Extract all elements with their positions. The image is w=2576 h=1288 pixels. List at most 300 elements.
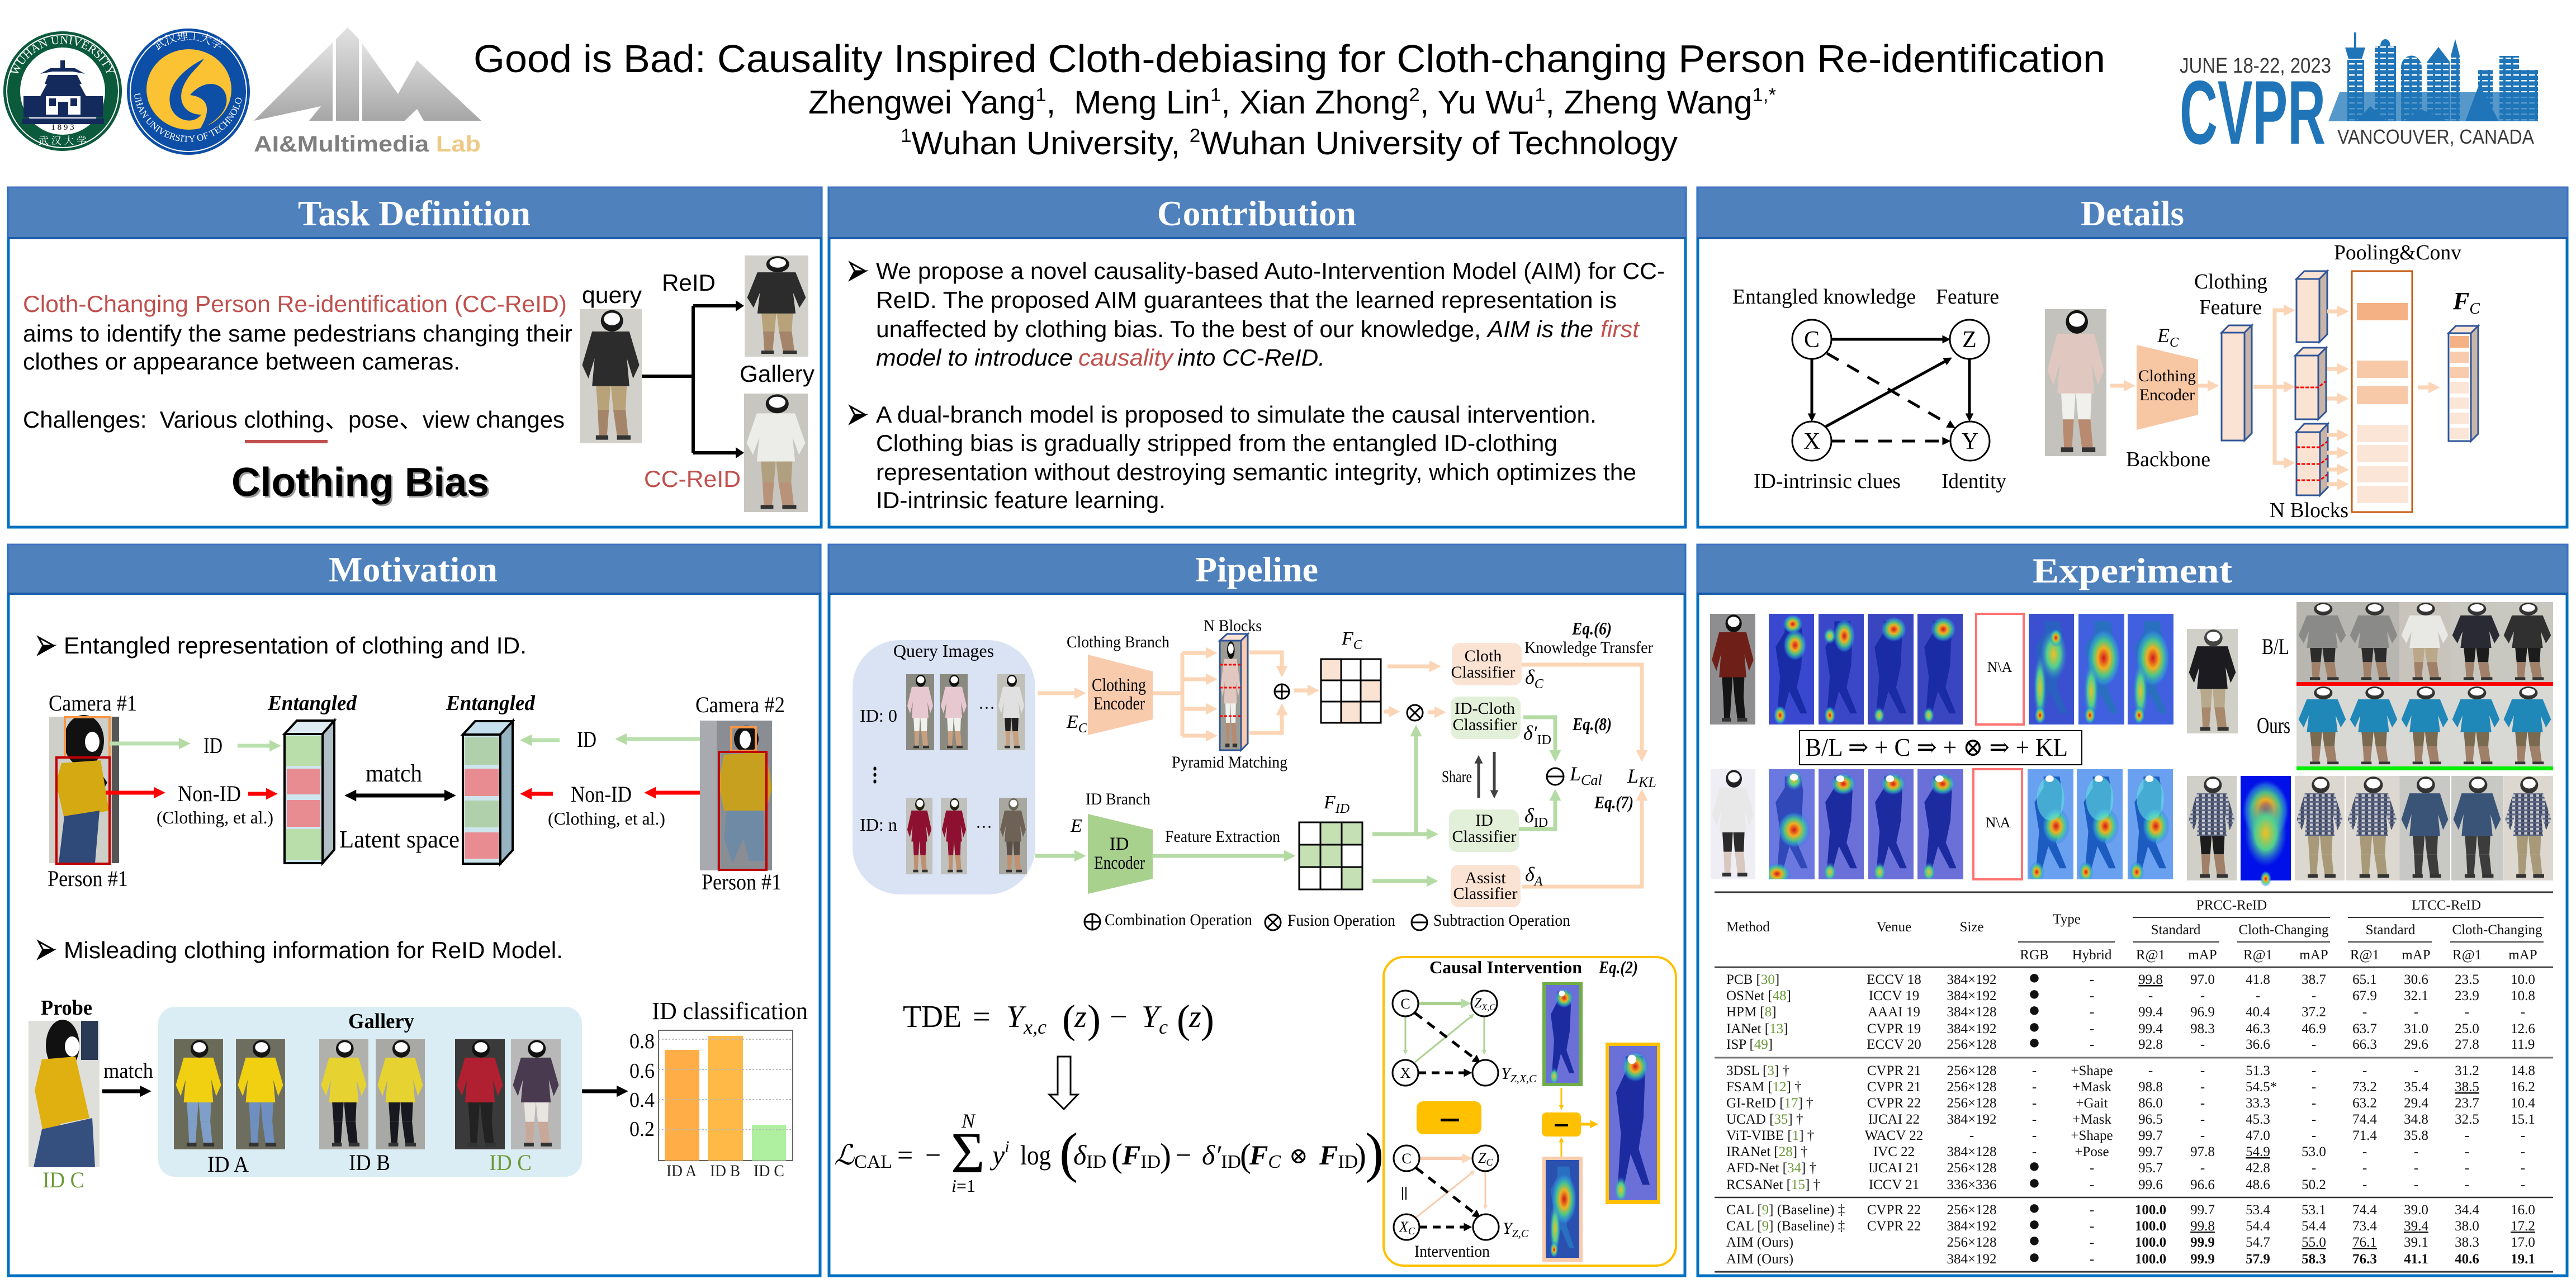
table group: single-modal methods: 23.5 <box>2455 972 2479 987</box>
classifiers <box>1449 643 1522 907</box>
classifiers: Classifier <box>1451 663 1515 681</box>
gallery box: ID B <box>349 1150 390 1175</box>
table group: hybrid methods: - <box>2362 1144 2367 1159</box>
retrieval row: ours <box>2296 686 2553 770</box>
table group: hybrid methods: - <box>2362 1161 2367 1176</box>
table group: hybrid methods: 54.9 <box>2246 1144 2270 1159</box>
loss labels: Eq.(7) <box>1594 792 1633 812</box>
clothing encoder: Backbone <box>2126 448 2210 471</box>
table group: hybrid methods: 29.4 <box>2404 1096 2428 1111</box>
text block: contribution 2: ID-intrinsic feature learning. <box>876 487 1166 513</box>
query images box <box>853 640 1035 894</box>
table group: hybrid methods: - <box>2032 1128 2037 1143</box>
table group: single-modal methods: 67.9 <box>2352 988 2377 1003</box>
table group: baseline and ours: 99.8 <box>2190 1219 2215 1234</box>
table group: baseline and ours: 73.4 <box>2352 1219 2377 1234</box>
table group: single-modal methods: 384×192 <box>1947 972 1997 987</box>
table group: hybrid methods: 384×128 <box>1947 1144 1997 1159</box>
table group: baseline and ours: 57.9 <box>2246 1252 2270 1267</box>
clothing encoder: E <box>2157 324 2170 347</box>
equation: TDE: − <box>1110 1000 1128 1034</box>
table group: hybrid methods: RCSANet [15] † <box>1726 1177 1820 1192</box>
table group: hybrid methods: 32.5 <box>2455 1112 2479 1127</box>
table group: hybrid methods: IJCAI 21 <box>1868 1161 1920 1176</box>
table group: single-modal methods: 25.0 <box>2455 1021 2479 1036</box>
table group: hybrid methods <box>1726 1063 2535 1194</box>
table group: single-modal methods: - <box>2148 988 2153 1003</box>
icon: bullet arrow <box>39 637 54 654</box>
table group: single-modal methods: ● <box>2028 982 2040 1005</box>
query images box: ··· <box>978 699 995 717</box>
table group: hybrid methods: - <box>2200 1063 2205 1078</box>
causal graph: factual: Y <box>1501 1064 1510 1083</box>
entangled diagram: ID <box>203 733 222 758</box>
feature grid: FID <box>1299 822 1362 889</box>
logo: CVPR 2023 Vancouver: VANCOUVER, CANADA <box>2337 125 2534 148</box>
entangled diagram: ID <box>577 727 596 752</box>
gallery box <box>158 1007 582 1177</box>
equation: TDE: ) <box>1087 997 1101 1041</box>
gallery box: ID C <box>489 1150 532 1175</box>
table group: hybrid methods: - <box>2521 1144 2525 1159</box>
table header: Hybrid <box>2072 948 2112 963</box>
table group: hybrid methods: - <box>1969 1128 1974 1143</box>
text block: contribution 2: representation without destroying semantic integrity, which optimizes the <box>876 459 1636 485</box>
text block: contribution 1: causality <box>1078 344 1175 371</box>
table group: hybrid methods: - <box>2414 1144 2418 1159</box>
table group: single-modal methods: 65.1 <box>2352 972 2377 987</box>
table group: hybrid methods: IJCAI 22 <box>1868 1112 1920 1127</box>
table group: hybrid methods: - <box>2032 1079 2037 1095</box>
loss labels <box>1442 618 1656 889</box>
table group: single-modal methods: - <box>2090 988 2094 1003</box>
table group: baseline and ours: 99.9 <box>2190 1235 2215 1250</box>
table group: baseline and ours: 100.0 <box>2135 1202 2166 1218</box>
equation: CAL loss: − <box>1176 1139 1191 1171</box>
table group: hybrid methods: +Mask <box>2072 1112 2111 1127</box>
entangled diagram: Latent space <box>339 826 460 853</box>
title: Good is Bad: Causality Inspired Cloth-debiasing for Cloth-changing Person Re-identification <box>473 37 2105 80</box>
table group: hybrid methods: 14.8 <box>2511 1063 2535 1078</box>
panel: Experiment <box>1697 544 2568 1276</box>
logo: Wuhan University: 武 汉 大 学 <box>39 133 87 148</box>
table group: baseline and ours: 100.0 <box>2135 1235 2166 1250</box>
table group: hybrid methods: - <box>2465 1144 2469 1159</box>
clothing branch <box>1038 617 1363 771</box>
table group: baseline and ours: 76.1 <box>2352 1235 2377 1250</box>
authors: 1,* <box>1752 84 1776 106</box>
classifiers: ID <box>1475 811 1493 830</box>
table group: single-modal methods: 66.3 <box>2352 1037 2377 1052</box>
table group: hybrid methods: 54.5* <box>2246 1079 2277 1095</box>
equation: CAL loss: ) <box>1355 1137 1366 1174</box>
gallery box: ID A <box>207 1152 249 1177</box>
table group: single-modal methods: 10.8 <box>2511 988 2535 1003</box>
equation: TDE: ( <box>1177 997 1190 1041</box>
text block: definition <box>23 291 572 433</box>
affiliations: Wuhan University of Technology <box>1200 125 1678 162</box>
equation: CAL loss: ) <box>1365 1121 1384 1183</box>
table header: mAP <box>2402 948 2431 963</box>
table group: hybrid methods: 99.7 <box>2138 1128 2163 1143</box>
table group: hybrid methods: 23.7 <box>2455 1096 2479 1111</box>
table group: hybrid methods: 31.2 <box>2455 1063 2479 1078</box>
table group: hybrid methods: 99.7 <box>2138 1144 2163 1159</box>
table group: baseline and ours: 38.3 <box>2455 1235 2479 1250</box>
table group: baseline and ours: CAL [9] (Baseline) ‡ <box>1726 1202 1845 1218</box>
entangled diagram: (Clothing, et al.) <box>548 808 665 828</box>
table group: hybrid methods: 74.4 <box>2352 1112 2377 1127</box>
table group: baseline and ours: CVPR 22 <box>1867 1219 1921 1234</box>
table group: hybrid methods: - <box>2312 1161 2316 1176</box>
heatmap row 2 <box>1711 769 2173 885</box>
bar chart: ID classification: ID classification <box>652 997 808 1025</box>
box: causal intervention <box>1384 957 1676 1266</box>
feature grid: FC <box>1321 659 1381 723</box>
causal graph: intervention: Y <box>1503 1219 1512 1238</box>
heatmap row 1: N\A <box>1987 659 2012 675</box>
table group: hybrid methods: 35.4 <box>2404 1079 2428 1095</box>
table group: hybrid methods: 45.3 <box>2246 1112 2270 1127</box>
equation: CAL loss: F <box>1319 1139 1338 1171</box>
loss labels: Share <box>1442 768 1472 786</box>
text block: contribution 2: Clothing bias is gradually stripped from the entangled ID-clothing <box>876 430 1557 456</box>
authors: 1 <box>1535 84 1545 106</box>
table group: hybrid methods: 50.2 <box>2302 1177 2326 1192</box>
bar chart: ID classification: ID B <box>710 1162 740 1180</box>
photo: input person <box>2045 309 2106 456</box>
equation: TDE: c <box>1159 1016 1168 1038</box>
table group: single-modal methods: - <box>2200 988 2205 1003</box>
table group: single-modal methods: 92.8 <box>2138 1037 2163 1052</box>
table group: baseline and ours: 39.1 <box>2404 1235 2428 1250</box>
heading: Motivation <box>329 550 498 589</box>
table header: mAP <box>2188 948 2217 963</box>
causal graph: factual: X,C <box>1481 1003 1495 1012</box>
equation: CAL loss: − <box>925 1139 941 1171</box>
bar chart: ID classification: 0.8 <box>629 1030 655 1053</box>
table group: baseline and ours: AIM (Ours) <box>1726 1235 1793 1250</box>
retrieval row: plaid <box>2187 776 2553 887</box>
bar chart: ID classification: 0.2 <box>629 1117 655 1141</box>
table group: hybrid methods: - <box>2521 1161 2525 1176</box>
legend: operations: Fusion Operation <box>1287 911 1395 930</box>
table header: LTCC-ReID <box>2412 898 2481 913</box>
equation: CAL loss: N <box>961 1110 976 1132</box>
causal graph: intervention: C <box>1486 1157 1493 1168</box>
heatmap row 1 <box>1710 614 2174 725</box>
table group: single-modal methods: - <box>2521 1005 2525 1020</box>
text block: definition: aims to identify the same pedestrians changing their <box>23 320 572 347</box>
table group: single-modal methods: ● <box>2028 966 2040 988</box>
box: causal intervention: Causal Intervention <box>1429 957 1582 977</box>
table group: single-modal methods: 96.9 <box>2190 1005 2215 1020</box>
table header: R@1 <box>2350 948 2379 963</box>
table group: single-modal methods: AAAI 19 <box>1868 1005 1920 1020</box>
icon: bullet arrow 2 <box>850 406 865 423</box>
table group: baseline and ours: 54.7 <box>2246 1235 2270 1250</box>
table group: hybrid methods: ViT-VIBE [1] † <box>1726 1128 1814 1143</box>
clothing encoder: Feature <box>2199 296 2262 319</box>
equation: TDE <box>903 997 1214 1041</box>
table group: single-modal methods: 41.8 <box>2246 972 2270 987</box>
table group: hybrid methods: - <box>2465 1128 2469 1143</box>
table group: single-modal methods: - <box>2200 1037 2205 1052</box>
table group: hybrid methods: - <box>2200 1128 2205 1143</box>
arrow: hollow down <box>1049 1057 1078 1109</box>
heatmap: intervention <box>1542 1157 1583 1262</box>
table group: single-modal methods: ECCV 20 <box>1867 1037 1921 1052</box>
table header: R@1 <box>2452 948 2482 963</box>
table group: single-modal methods: 37.2 <box>2302 1005 2326 1020</box>
equation: CAL loss: ℒ <box>834 1139 854 1171</box>
equation: CAL loss: ID <box>1086 1152 1106 1172</box>
gallery box: Gallery <box>348 1010 414 1033</box>
table group: hybrid methods: ● <box>2028 1154 2040 1177</box>
equation: CAL loss: F <box>1249 1139 1268 1171</box>
causal graph: C <box>1804 327 1820 353</box>
table header: Standard <box>2366 922 2416 937</box>
table group: single-modal methods: OSNet [48] <box>1726 988 1791 1003</box>
label: query: query <box>582 282 642 308</box>
equation: CAL loss: y <box>992 1139 1005 1171</box>
table group: baseline and ours <box>1726 1196 2535 1268</box>
table group: hybrid methods: - <box>2362 1177 2367 1192</box>
authors: , Yu Wu <box>1420 84 1535 121</box>
table group: single-modal methods: 31.0 <box>2404 1021 2428 1036</box>
clothing encoder: C <box>2170 335 2179 350</box>
loss labels: L <box>1627 765 1639 787</box>
table group: single-modal methods: IANet [13] <box>1726 1021 1788 1036</box>
table group: hybrid methods: 97.8 <box>2190 1144 2215 1159</box>
table group: single-modal methods: 97.0 <box>2190 972 2215 987</box>
table group: hybrid methods: 53.0 <box>2302 1144 2326 1159</box>
logo: CVPR 2023 Vancouver: JUNE 18-22, 2023 <box>2180 54 2331 78</box>
table group: hybrid methods: - <box>2312 1096 2316 1111</box>
clothing branch: Clothing Branch <box>1067 633 1169 651</box>
text block: contribution 1 <box>876 258 1665 371</box>
equation: TDE: z <box>1074 1000 1087 1034</box>
table group: baseline and ours: CAL [9] (Baseline) ‡ <box>1726 1219 1845 1234</box>
table group: hybrid methods: - <box>2465 1161 2469 1176</box>
table group: hybrid methods: - <box>2090 1177 2094 1192</box>
table group: hybrid methods: - <box>2032 1112 2037 1127</box>
table group: single-modal methods: 27.8 <box>2455 1037 2479 1052</box>
equation: CAL loss: ID <box>1140 1152 1161 1172</box>
logo: Wuhan University of Technology: 武汉理工大学 <box>154 31 223 50</box>
logo: CVPR 2023 Vancouver <box>2180 32 2538 163</box>
classifiers: Classifier <box>1453 716 1517 734</box>
panel: Pipeline <box>828 544 1685 1276</box>
loss labels: L <box>1570 763 1581 785</box>
ID branch: ID <box>1335 802 1349 816</box>
table group: hybrid methods: 15.1 <box>2511 1112 2535 1127</box>
loss labels: Cal <box>1581 772 1602 788</box>
table group: baseline and ours: 54.4 <box>2302 1219 2326 1234</box>
table group: hybrid methods: 16.2 <box>2511 1079 2535 1095</box>
photo: camera 1 person <box>49 715 119 863</box>
entangled diagram: match <box>366 760 422 787</box>
table group: hybrid methods: - <box>2521 1177 2525 1192</box>
entangled diagram: Camera #2 <box>695 692 785 717</box>
table group: single-modal methods: 38.7 <box>2302 972 2326 987</box>
table group: hybrid methods: WACV 22 <box>1865 1128 1923 1143</box>
text block: contribution 1: ReID. The proposed AIM guarantees that the learned representation is <box>876 287 1617 313</box>
heatmap: factual <box>1542 982 1583 1086</box>
table group: hybrid methods: 35.8 <box>2404 1128 2428 1143</box>
causal graph: factual: C <box>1400 996 1410 1012</box>
table header: PRCC-ReID <box>2196 898 2267 913</box>
table group: hybrid methods: - <box>2312 1128 2316 1143</box>
table group: single-modal methods: 384×192 <box>1947 1021 1997 1036</box>
bar chart: ID classification <box>629 997 808 1180</box>
photo: gallery same clothes <box>745 255 808 357</box>
table group: baseline and ours: - <box>2090 1219 2094 1234</box>
text block: contribution 1: into CC-ReID. <box>1177 344 1325 371</box>
causal graph: Z <box>1962 327 1977 353</box>
table group: single-modal methods: 99.4 <box>2138 1005 2163 1020</box>
causal graph: factual: Z <box>1474 996 1481 1011</box>
table group: hybrid methods: - <box>2312 1079 2316 1095</box>
probe image <box>29 996 153 1192</box>
causal graph: ID-intrinsic clues <box>1754 470 1901 493</box>
table group: single-modal methods: 99.8 <box>2138 972 2163 987</box>
table group: single-modal methods: CVPR 19 <box>1867 1021 1921 1036</box>
table group: hybrid methods: 48.6 <box>2246 1177 2270 1192</box>
table rules <box>1715 892 2553 1272</box>
table header: mAP <box>2508 948 2537 963</box>
table header: Type <box>2053 912 2081 927</box>
equation: CAL loss: C <box>1268 1152 1281 1172</box>
ID branch: E <box>1070 816 1082 836</box>
table group: hybrid methods: - <box>2414 1177 2418 1192</box>
logo: CVPR 2023 Vancouver: CVPR <box>2180 62 2326 163</box>
clothing branch: Encoder <box>1093 694 1145 714</box>
bar chart: ID classification: ID C <box>754 1162 784 1180</box>
table group: hybrid methods: +Mask <box>2072 1079 2111 1095</box>
table group: hybrid methods: - <box>2414 1161 2418 1176</box>
table group: hybrid methods: AFD-Net [34] † <box>1726 1161 1816 1176</box>
equation: TDE: ( <box>1062 997 1076 1041</box>
causal graph: factual: Z,X,C <box>1510 1073 1537 1085</box>
table group: hybrid methods: 256×128 <box>1947 1063 1997 1078</box>
authors: 2 <box>1409 84 1420 106</box>
table group: baseline and ours: 99.9 <box>2190 1252 2215 1267</box>
table group: hybrid methods: 86.0 <box>2138 1096 2163 1111</box>
label: CC-ReID: CC-ReID <box>644 466 741 492</box>
table group: hybrid methods: ICCV 21 <box>1869 1177 1919 1192</box>
logo: Wuhan University <box>3 31 122 151</box>
equation: CAL loss: ID <box>1338 1152 1358 1172</box>
table group: baseline and ours: ● <box>2028 1213 2040 1235</box>
query images box: ID: 0 <box>860 705 897 726</box>
table group: hybrid methods: 99.6 <box>2138 1177 2163 1192</box>
table group: hybrid methods: CVPR 22 <box>1867 1096 1921 1111</box>
table group: baseline and ours: 76.3 <box>2352 1252 2377 1267</box>
clothing branch: F <box>1342 628 1353 649</box>
table group: baseline and ours: 39.0 <box>2404 1202 2428 1218</box>
loss labels: δ′ <box>1523 722 1537 744</box>
table group: hybrid methods: CVPR 21 <box>1867 1063 1921 1078</box>
equation: CAL loss: i <box>1005 1138 1010 1156</box>
table group: single-modal methods: HPM [8] <box>1726 1005 1777 1020</box>
equation: TDE: x,c <box>1023 1016 1046 1038</box>
table group: single-modal methods: 12.6 <box>2511 1021 2535 1036</box>
heading: Task Definition <box>298 194 531 233</box>
table group: single-modal methods: 32.1 <box>2404 988 2428 1003</box>
table group: hybrid methods: +Shape <box>2071 1063 2113 1078</box>
table group: baseline and ours: - <box>2090 1252 2094 1267</box>
table header: mAP <box>2299 948 2328 963</box>
text block: contribution 1: We propose a novel causality-based Auto-Intervention Model (AIM) for CC- <box>876 258 1665 284</box>
probe image: match <box>103 1059 153 1083</box>
equation: CAL loss: Σ <box>951 1121 985 1185</box>
authors: 1 <box>1210 84 1221 106</box>
icon: bullet arrow 1 <box>850 263 865 280</box>
entangled diagram: (Clothing, et al.) <box>157 807 273 827</box>
table group: single-modal methods: 11.9 <box>2511 1037 2535 1052</box>
table group: single-modal methods: 29.6 <box>2404 1037 2428 1052</box>
equation: CAL loss: log <box>1020 1139 1051 1171</box>
legend: operations <box>1085 911 1570 930</box>
table group: single-modal methods: - <box>2090 1021 2094 1036</box>
ID branch: F <box>1324 792 1336 813</box>
causal graph: intervention: Z,C <box>1512 1228 1529 1240</box>
ID branch: ID <box>1110 834 1129 854</box>
probe image: ID C <box>42 1167 84 1192</box>
table group: single-modal methods: 23.9 <box>2455 988 2479 1003</box>
table group: hybrid methods: - <box>2200 1079 2205 1095</box>
table group: hybrid methods: 51.3 <box>2246 1063 2270 1078</box>
causal graph: intervention: C <box>1408 1225 1415 1237</box>
heatmap row 2: N\A <box>1986 815 2011 831</box>
table group: baseline and ours: 99.7 <box>2190 1202 2215 1218</box>
clothing branch: C <box>1353 638 1363 652</box>
table group: baseline and ours: ● <box>2028 1246 2040 1268</box>
table group: hybrid methods: FSAM [12] † <box>1726 1079 1802 1095</box>
output feature block <box>2449 326 2478 441</box>
table group: hybrid methods: 3DSL [3] † <box>1726 1063 1789 1078</box>
table group: hybrid methods: ● <box>2028 1171 2040 1194</box>
heading: Experiment <box>2033 551 2232 590</box>
table group: single-modal methods: 98.3 <box>2190 1021 2215 1036</box>
entangled diagram <box>48 690 785 894</box>
logo: AI and Multimedia Lab: AI&Multimedia Lab <box>254 132 481 157</box>
heading: Contribution <box>1157 194 1356 233</box>
table group: baseline and ours: 54.4 <box>2246 1219 2270 1234</box>
table group: single-modal methods: ● <box>2028 1015 2040 1038</box>
table group: hybrid methods: 384×192 <box>1947 1112 1997 1127</box>
table group: hybrid methods: 96.6 <box>2190 1177 2215 1192</box>
authors: , Xian Zhong <box>1221 84 1409 121</box>
text block: contribution 2: A dual-branch model is proposed to simulate the causal intervention. <box>876 401 1597 428</box>
entangled diagram: Non-ID <box>571 782 632 807</box>
table group: hybrid methods: 96.5 <box>2138 1112 2163 1127</box>
N blocks <box>2295 271 2328 495</box>
entangled diagram: Non-ID <box>178 781 241 806</box>
table group: hybrid methods: 63.2 <box>2352 1096 2377 1111</box>
table group: single-modal methods: 99.4 <box>2138 1021 2163 1036</box>
table group: single-modal methods: ICCV 19 <box>1869 988 1919 1003</box>
table group: hybrid methods: - <box>2312 1063 2316 1078</box>
causal graph: intervention <box>1394 1145 1529 1261</box>
table group: single-modal methods: - <box>2312 1037 2316 1052</box>
logo: Wuhan University: 1 8 9 3 <box>51 123 74 132</box>
table group: single-modal methods: - <box>2465 1005 2469 1020</box>
retrieval row: baseline <box>2296 602 2553 686</box>
entangled diagram: Entangled <box>267 692 357 715</box>
table group: hybrid methods: 95.7 <box>2138 1161 2163 1176</box>
